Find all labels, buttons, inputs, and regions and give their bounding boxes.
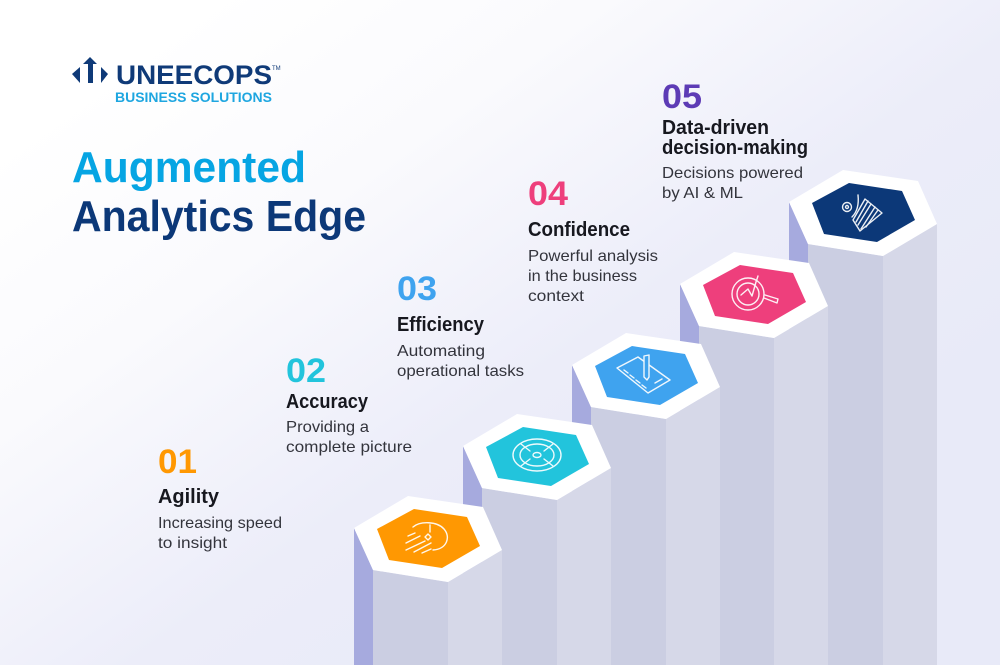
title: Analytics Edge [72, 192, 366, 241]
icon: speedometer [406, 523, 447, 553]
hexagon 5 [812, 183, 915, 242]
hexagon 3 [595, 346, 698, 405]
column 3 [572, 333, 720, 665]
step 5 text: Data-driven [662, 117, 769, 139]
step 4 text: Confidence [528, 219, 630, 241]
icon: magnifier with chart [732, 276, 778, 310]
step 3 text: operational tasks [397, 363, 524, 380]
logo: BUSINESS SOLUTIONS [115, 89, 272, 105]
step 2 text: complete picture [286, 439, 412, 456]
step 5 text [662, 78, 808, 202]
step 4 text: Powerful analysis [528, 248, 658, 265]
step 3 text: Automating [397, 343, 485, 360]
step 2 text [286, 352, 412, 456]
hexagon 4 [703, 265, 806, 324]
title [72, 143, 366, 241]
step 1 text: Increasing speed [158, 515, 282, 532]
step 5 text: decision-making [662, 137, 808, 159]
title: Augmented [72, 143, 306, 192]
step 2 text: Providing a [286, 419, 369, 436]
hexagon 2 [486, 427, 589, 486]
logo: TM [272, 66, 281, 72]
column 5 [789, 170, 937, 665]
step 4 text: in the business [528, 268, 637, 285]
icon: logo arrows [72, 57, 108, 83]
logo [72, 57, 281, 105]
step 5 text: 05 [662, 78, 702, 116]
step 4 text: context [528, 288, 585, 305]
icon: gear and bar chart [842, 195, 882, 231]
step 5 text: Decisions powered [662, 165, 803, 182]
step 3 text [397, 270, 524, 380]
step 3 text: Efficiency [397, 314, 485, 336]
hexagon 1 [377, 509, 480, 568]
step 3 text: 03 [397, 270, 437, 308]
step 4 text [528, 175, 658, 305]
step 2 text: 02 [286, 352, 326, 390]
step 4 text: 04 [528, 175, 568, 213]
step 1 text: 01 [158, 443, 197, 481]
step 1 text [158, 443, 282, 552]
step 5 text: by AI & ML [662, 185, 743, 202]
step 1 text: to insight [158, 535, 228, 552]
step 1 text: Agility [158, 486, 220, 508]
icon: target [513, 439, 561, 471]
step 2 text: Accuracy [286, 391, 369, 413]
icon: document and pencil [617, 355, 670, 393]
column 4 [680, 252, 828, 665]
column 1 [354, 496, 502, 665]
column 2 [463, 414, 611, 665]
logo: UNEECOPS [116, 60, 272, 90]
